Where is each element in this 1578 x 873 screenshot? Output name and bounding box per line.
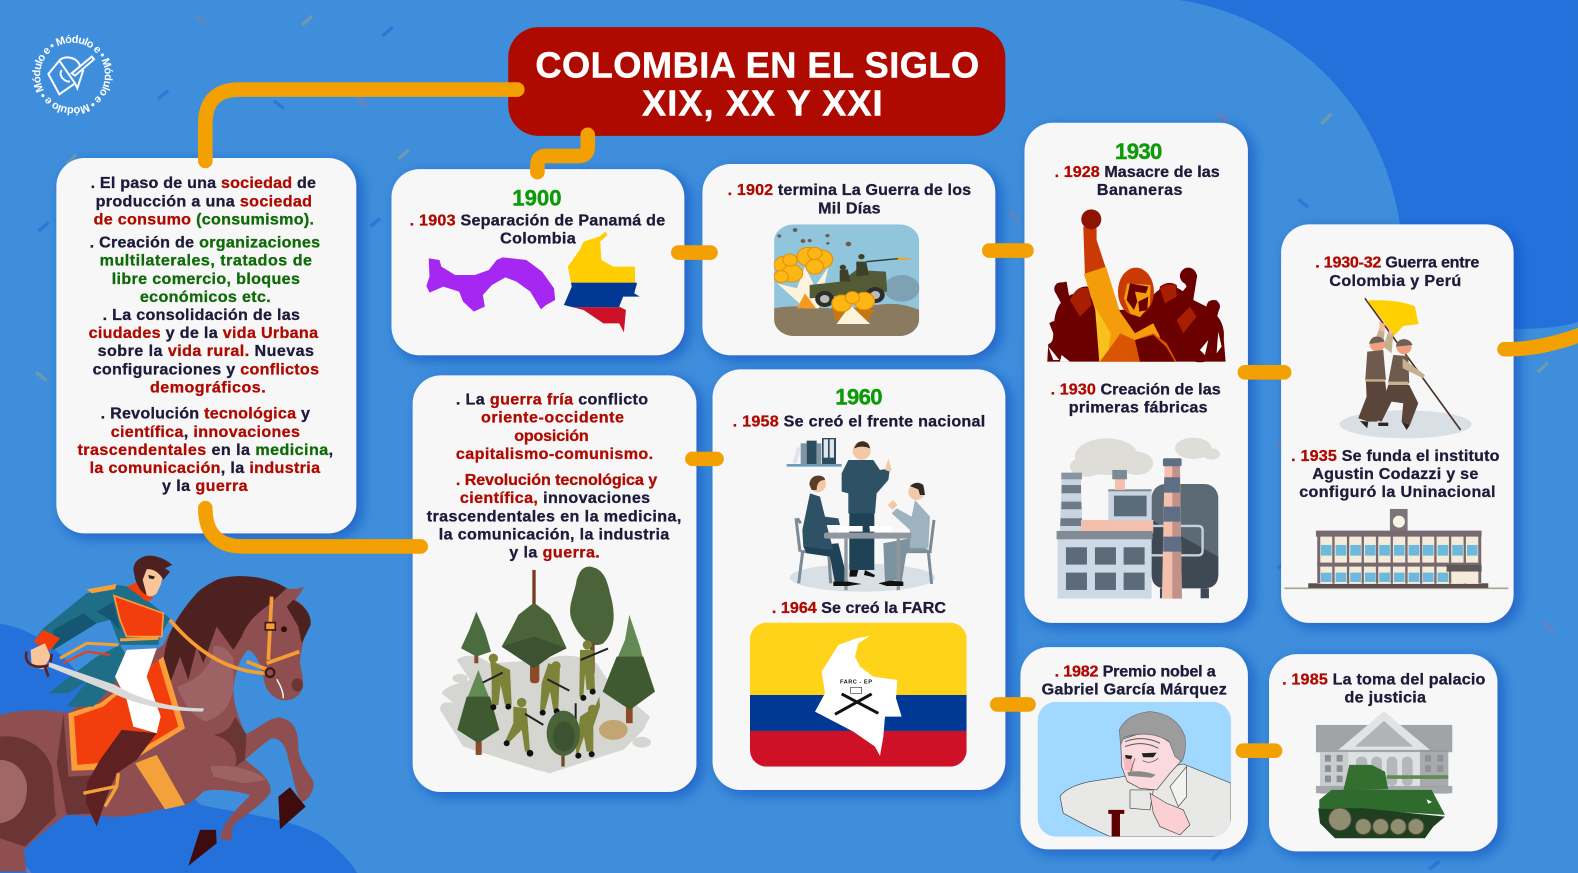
illustration: factory <box>1057 438 1220 599</box>
panel: 1982 <box>1020 647 1248 849</box>
heading: 1900: 1900 <box>512 185 562 210</box>
text block: revolucion tecnologica: científica, innovaciones <box>111 423 300 441</box>
text block: sociedad de consumo: de consumo (consumismo). <box>94 210 314 228</box>
text block: revolucion tecnologica: y la guerra <box>162 477 249 495</box>
connector: 1900 to 1902 <box>678 245 711 260</box>
panel: 1930 <box>1024 123 1248 623</box>
text: 1903 <box>410 211 665 248</box>
illustration: Gabriel Garcia Marquez <box>1038 702 1231 837</box>
illustration: soldiers in forest <box>440 567 655 773</box>
text: 1930-32: Colombia y Perú <box>1329 272 1461 290</box>
text block: revolucion tecnologica <box>78 405 333 495</box>
connector: 1930 to 1930-32 <box>1245 365 1284 380</box>
text block: sociedad de consumo: producción a una sociedad <box>96 192 312 210</box>
text: 1902: Mil Días <box>818 199 881 217</box>
text block: guerra fria: . La guerra fría conflicto <box>456 391 648 409</box>
text block: revolucion tecnologica: la comunicación, la industria <box>90 459 321 477</box>
text: 1982 <box>1042 662 1227 698</box>
text: 1935 <box>1291 447 1500 501</box>
text block: guerra fria: oriente-occidente <box>481 409 624 427</box>
text: 1930-32 <box>1315 254 1479 290</box>
icon: book and pencil <box>48 57 94 94</box>
reins and bridle <box>170 597 299 673</box>
illustration: raised fists crowd <box>1047 209 1226 362</box>
connector: 1982 to 1985 <box>1243 743 1275 758</box>
heading: 1930: 1930 <box>1115 139 1162 164</box>
text block: revolucion <box>427 471 681 562</box>
text block: sociedad de consumo: económicos etc. <box>140 288 271 306</box>
panel: 1960 <box>713 369 1005 790</box>
connector: guerra fria to 1960 <box>692 452 717 466</box>
text: 1985: . 1985 La toma del palacio <box>1282 670 1486 688</box>
connector: 1960 to 1982 <box>997 697 1029 712</box>
text: 1982: Gabriel García Márquez <box>1042 680 1227 698</box>
title <box>508 27 1005 136</box>
text block: revolucion: trascendentales en la medicina, <box>427 507 681 525</box>
text block: ciudades: . La consolidación de las <box>103 306 300 324</box>
panel: sociedad de consumo <box>56 158 356 533</box>
text: 1928 <box>1055 163 1220 199</box>
connector: 1902 to 1930 <box>989 243 1026 258</box>
connector: left panel to guerra fria <box>205 508 421 546</box>
panel: 1900 <box>391 169 684 355</box>
maps: Panama and Colombia <box>426 230 643 334</box>
text: 1902 <box>728 181 971 217</box>
illustration: meeting <box>787 438 935 592</box>
title: XIX, XX Y XXI <box>642 83 883 124</box>
text block: revolucion tecnologica: . Revolución tecnológica y <box>101 405 310 423</box>
leg <box>86 730 157 827</box>
text: 1903: Colombia <box>500 230 577 248</box>
text: 1935: configuró la Uninacional <box>1299 483 1495 501</box>
trousers <box>115 648 161 733</box>
text: 1935: Agustin Codazzi y se <box>1312 465 1478 483</box>
text: 1903: . 1903 Separación de Panamá de <box>410 211 665 229</box>
connector: title to 1900 <box>537 135 588 172</box>
illustration: rider on horse <box>0 556 314 872</box>
panel: guerra fria <box>413 375 696 792</box>
text block: sociedad de consumo: . Creación de organizaciones <box>90 234 320 252</box>
text block: ciudades: demográficos. <box>150 378 266 396</box>
text block: sociedad de consumo: libre comercio, bloques <box>112 270 300 288</box>
connector: exit right <box>1505 333 1578 349</box>
heading: 1960: 1960 <box>835 385 883 410</box>
title: COLOMBIA EN EL SIGLO <box>535 44 979 85</box>
hand and sword <box>31 643 51 669</box>
text block: sociedad de consumo: . El paso de una sociedad de <box>91 174 316 192</box>
horse shading <box>0 736 57 847</box>
background blob: bottom left <box>0 624 357 873</box>
girth <box>135 755 185 809</box>
text block: sociedad de consumo <box>90 174 320 306</box>
background blob: top right <box>1179 0 1578 329</box>
text block: ciudades <box>89 306 319 396</box>
text: 1935: . 1935 Se funda el instituto <box>1291 447 1500 465</box>
mane <box>163 576 287 683</box>
panel: 1985 <box>1269 654 1497 851</box>
illustration: soldiers with flag <box>1340 298 1472 438</box>
text: 1930 creacion: primeras fábricas <box>1069 399 1208 417</box>
head <box>136 565 163 596</box>
illustration: FARC flag <box>750 623 967 767</box>
text: 1982: . 1982 Premio nobel a <box>1055 662 1217 680</box>
illustration: Agustin Codazzi building <box>1284 509 1508 588</box>
text block: guerra fria <box>456 391 653 463</box>
illustration: war jeep <box>774 224 920 336</box>
text: 1930 creacion <box>1051 380 1221 417</box>
map: Colombia flag <box>564 232 640 332</box>
panel: 1902 <box>702 164 995 355</box>
text: 1964: . 1964 Se creó la FARC <box>772 599 946 617</box>
text block: guerra fria: capitalismo-comunismo. <box>456 445 653 463</box>
text: 1930 creacion: . 1930 Creación de las <box>1051 380 1221 398</box>
text block: ciudades: configuraciones y conflictos <box>93 360 319 378</box>
text: 1930-32: . 1930-32 Guerra entre <box>1315 254 1479 272</box>
illustration: FARC flag: FARC - EP <box>840 679 872 685</box>
coat tails <box>48 645 127 707</box>
horse body <box>0 577 314 872</box>
connector: title to left panel <box>205 90 517 161</box>
text: 1985: de justicia <box>1344 688 1427 706</box>
text: 1958: . 1958 Se creó el frente nacional <box>733 413 985 431</box>
text block: revolucion tecnologica: trascendentales en la medicina, <box>78 441 333 459</box>
text block: revolucion: y la guerra. <box>509 544 600 562</box>
map: Panama <box>426 257 555 312</box>
panel: 1930-32 <box>1281 224 1514 623</box>
text: 1902: . 1902 termina La Guerra de los <box>728 181 971 199</box>
text: 1985 <box>1282 670 1486 706</box>
text block: guerra fria: oposición <box>514 427 589 445</box>
saddle cloth <box>68 657 185 771</box>
text block: ciudades: sobre la vida rural. Nuevas <box>98 342 314 360</box>
coat <box>33 585 170 650</box>
connectors <box>205 90 1578 751</box>
logo: Modulo e: Módulo e • Módulo e • Módulo e • Módulo e • <box>32 34 113 116</box>
text block: revolucion: científica, innovaciones <box>460 489 650 507</box>
text: 1928: Bananeras <box>1097 181 1183 199</box>
text block: revolucion: . Revolución tecnológica y <box>456 471 657 489</box>
text: 1928: . 1928 Masacre de las <box>1055 163 1220 181</box>
text block: ciudades: ciudades y de la vida Urbana <box>89 324 319 342</box>
illustration: palace and tank <box>1316 711 1452 838</box>
text block: revolucion: la comunicación, la industria <box>439 525 670 543</box>
text block: sociedad de consumo: multilaterales, tratados de <box>100 252 312 270</box>
hooves <box>278 787 306 829</box>
